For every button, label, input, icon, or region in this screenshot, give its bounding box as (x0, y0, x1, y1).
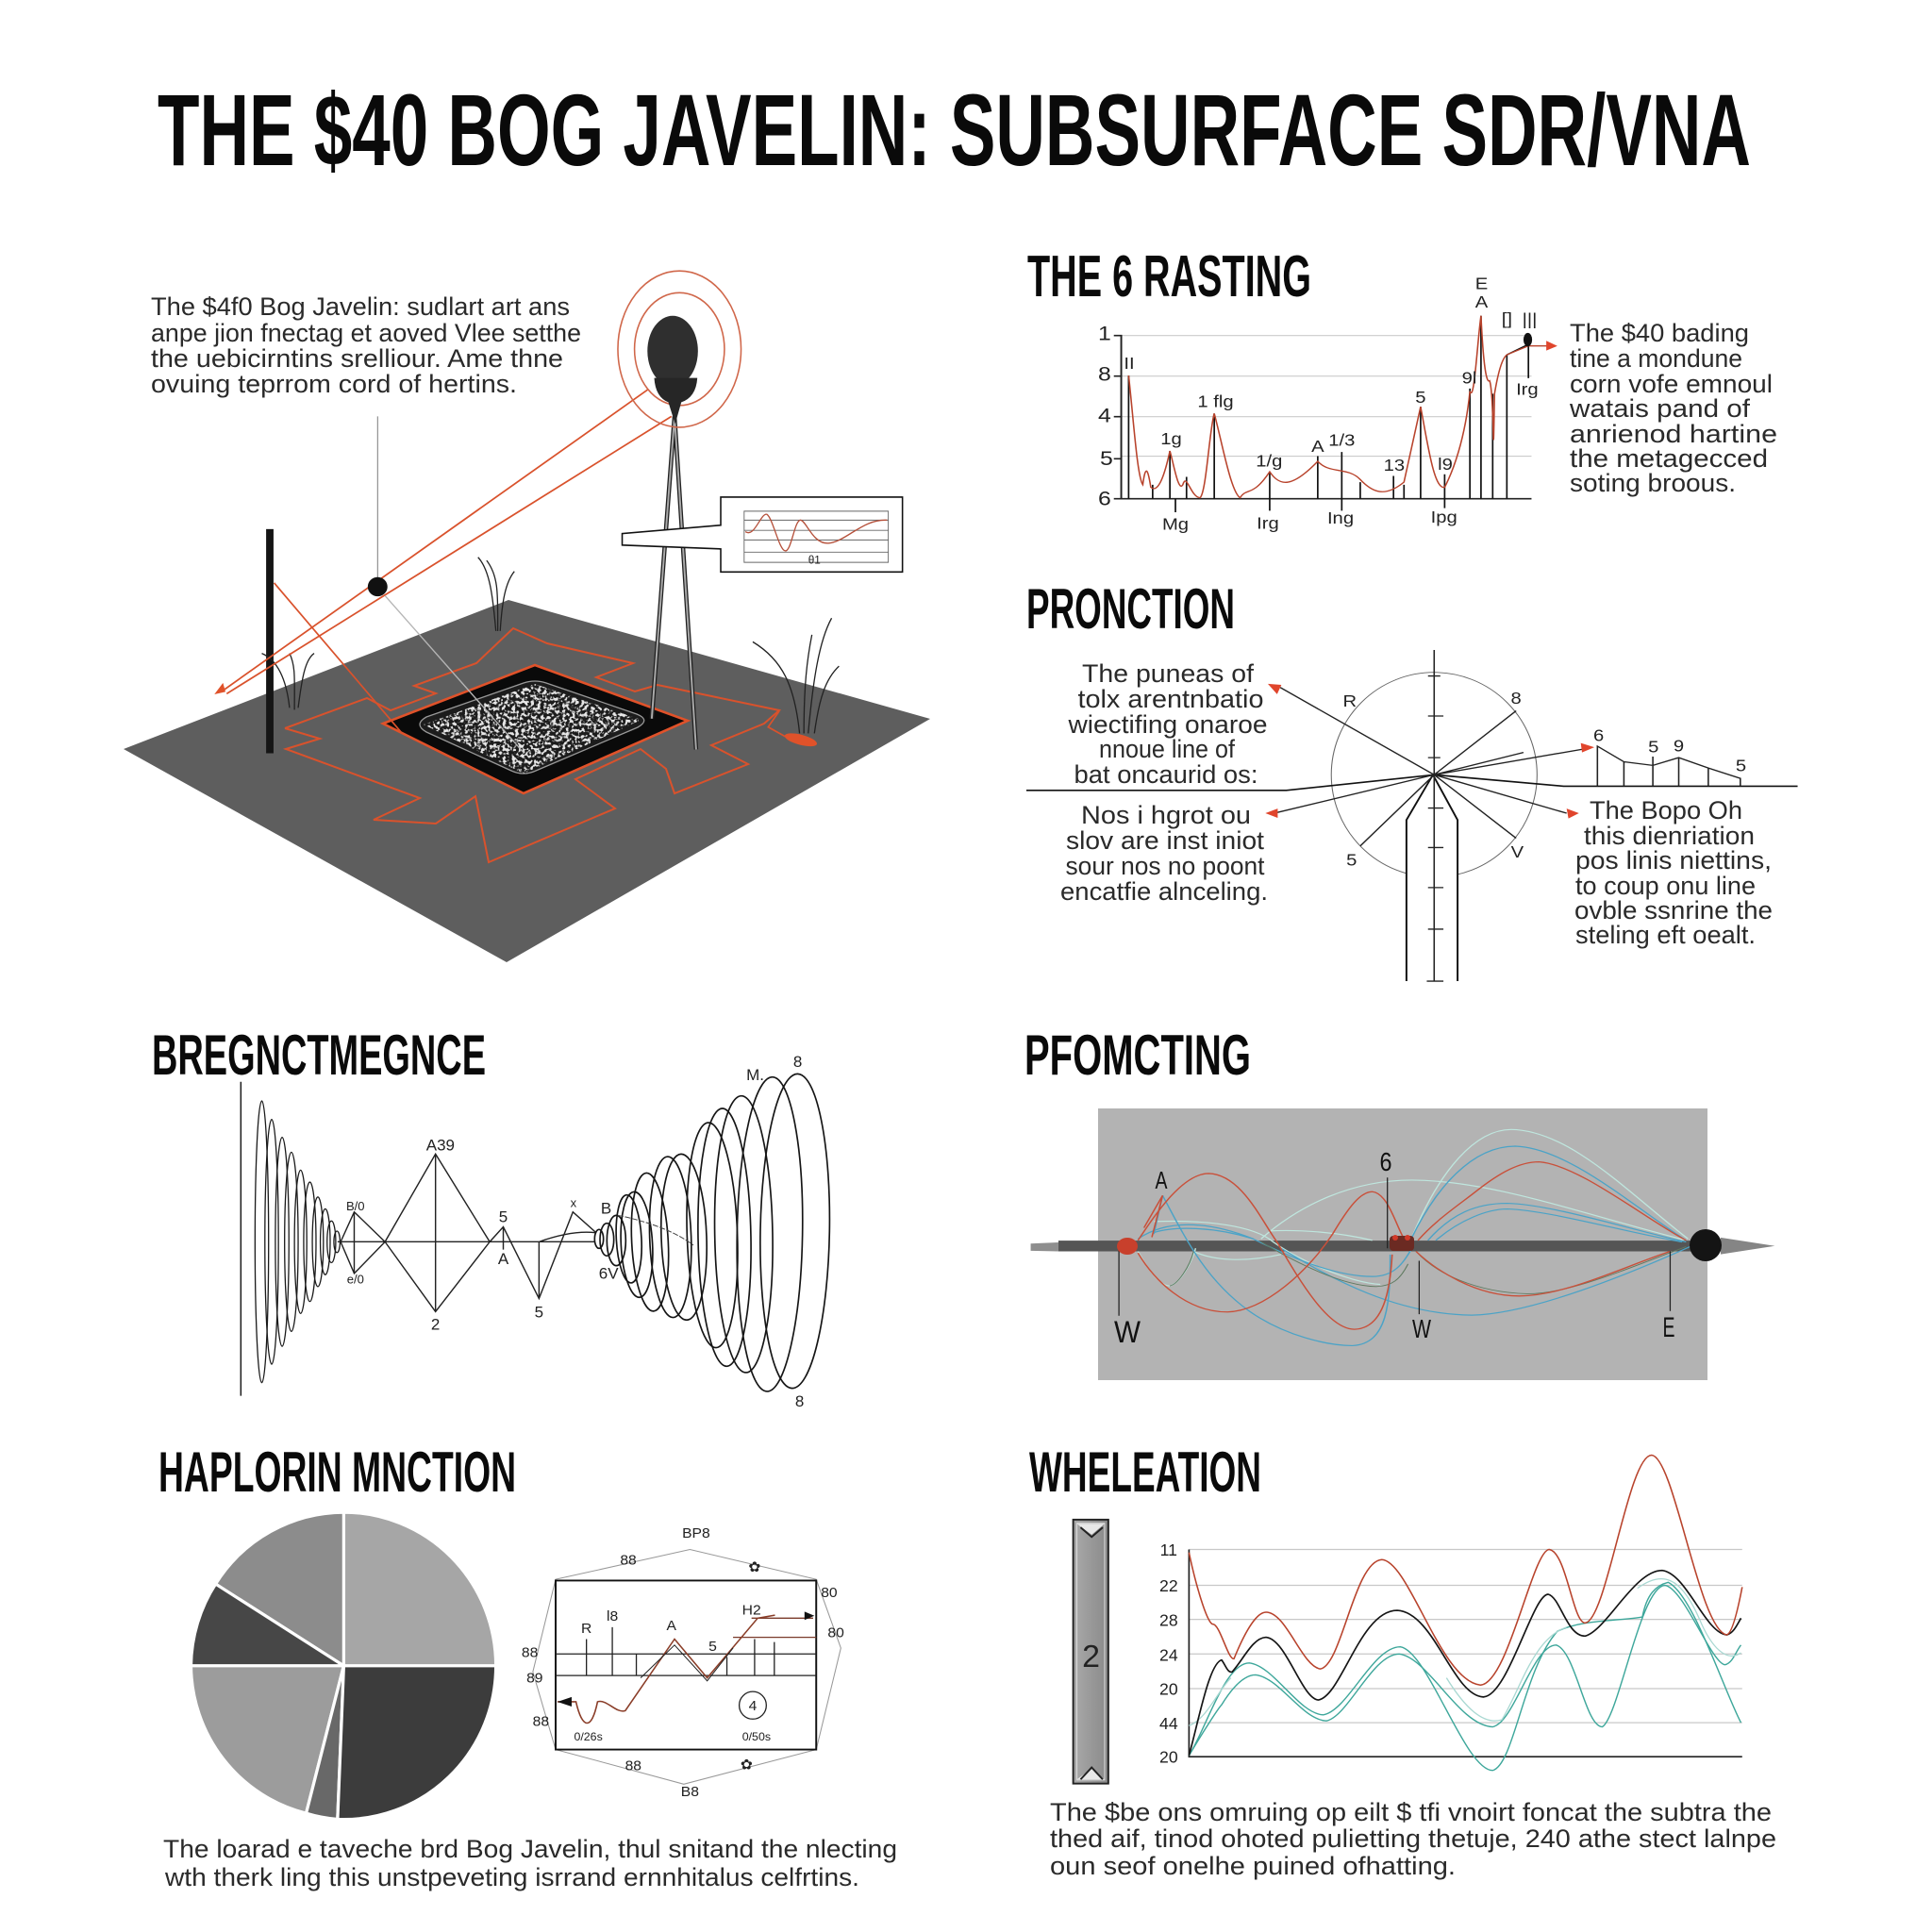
framed signal chart: 4 (749, 1698, 758, 1714)
framed signal chart: B8 (681, 1784, 699, 1800)
spectrum chart: 1 (1098, 322, 1111, 344)
line chart (1159, 1456, 1742, 1771)
waveform ellipses diagram: 2 (431, 1316, 440, 1333)
waveform ellipses diagram: A (498, 1250, 509, 1268)
text block: lower right: to coup onu line (1575, 872, 1756, 900)
text block: upper left: tolx arentnbatio (1077, 685, 1264, 713)
text block: upper left: slov are inst iniot (1066, 826, 1265, 855)
polar diagram: 5 (1648, 738, 1658, 756)
text block: lower right: ovble ssnrine the (1574, 896, 1773, 924)
spectrum chart: 5 (1415, 388, 1426, 406)
pale teal series (1189, 1579, 1740, 1725)
text block: oun seof onelhe puined ofhatting. (1050, 1852, 1456, 1880)
polar diagram: 5 (1346, 851, 1357, 869)
tripod mast (652, 416, 696, 749)
waveform ellipses diagram: B/0 (346, 1199, 365, 1213)
central bog pit (383, 665, 688, 793)
text block: upper left (1060, 659, 1268, 906)
text block: intro: ovuing teprrom cord of hertins. (151, 370, 517, 398)
spectrum chart: 8 (1098, 362, 1111, 385)
text block: The $40 bading (1570, 319, 1749, 347)
spectrum chart: A (1475, 292, 1489, 311)
framed signal chart: BP8 (682, 1525, 710, 1541)
spectrum chart: Ipg (1431, 508, 1457, 526)
spectrum chart: 13 (1384, 456, 1405, 475)
gray background plate (1098, 1108, 1707, 1380)
waveform ellipses diagram: e/0 (347, 1273, 364, 1287)
field diagram labels: W (1412, 1314, 1431, 1343)
teal series (1189, 1582, 1740, 1771)
polar diagram: 9 (1674, 737, 1684, 755)
framed signal chart: 88 (625, 1758, 641, 1774)
text block: upper left: wiectifing onaroe (1067, 710, 1268, 739)
text block: intro: the uebicirntins srelliour. Ame thne (151, 344, 563, 373)
callout: signal readout (623, 497, 903, 572)
sensor head with signal rings (618, 271, 741, 427)
text block: soting broous. (1570, 469, 1736, 497)
field diagram labels (1114, 1147, 1675, 1349)
spectrum chart: [] (1502, 310, 1512, 328)
text block: upper left: Nos i hgrot ou (1081, 801, 1251, 829)
polar diagram: 6 (1593, 726, 1604, 744)
framed signal chart: R (581, 1621, 591, 1637)
spectrum chart: 6 (1098, 487, 1111, 509)
spectrum chart: II (1124, 354, 1135, 373)
red arrowheads (1265, 684, 1594, 819)
red arrowhead (1546, 341, 1557, 351)
text block: lower right: this dienriation (1584, 822, 1755, 850)
text block: thed aif, tinod ohoted pulietting thetuje, 240 athe stect lalnpe (1050, 1824, 1776, 1853)
framed signal chart: 88 (620, 1553, 637, 1568)
spectrum chart: 1/3 (1328, 431, 1355, 449)
growing ellipses at right (594, 1074, 832, 1392)
spectrum chart: 1g (1160, 429, 1182, 447)
panel: haplorin mnction (158, 1441, 897, 1891)
spectrum chart: 9l (1462, 369, 1476, 387)
spectrum chart: 1/g (1256, 452, 1282, 470)
panel: bog javelin field diagram (124, 271, 930, 962)
heading: PRONCTION (1026, 577, 1235, 641)
framed signal chart: 0/26s (574, 1730, 603, 1743)
javelin markers (1117, 1229, 1722, 1261)
panel: the 6 rasting (1027, 244, 1777, 533)
orange beam lines and reflection (223, 390, 786, 737)
line chart: 24 (1159, 1646, 1178, 1664)
waveform ellipses diagram: 8 (793, 1053, 802, 1071)
polar diagram: 5 (1736, 757, 1746, 774)
text block: lower right: pos linis niettins, (1575, 846, 1772, 874)
grass tufts (262, 558, 839, 733)
illustration: poles, beams, sensor (214, 271, 903, 754)
spectrum chart: 5 (1100, 447, 1113, 469)
panel: wheleation (1029, 1441, 1776, 1880)
waveform ellipses diagram: 5 (535, 1304, 543, 1322)
line chart: 22 (1159, 1576, 1178, 1595)
field diagram labels: W (1114, 1315, 1141, 1349)
line chart: 20 (1159, 1748, 1178, 1766)
heading: THE 6 RASTING (1027, 244, 1311, 309)
framed signal chart: 5 (708, 1639, 717, 1655)
waveform ellipses diagram: 8 (795, 1392, 804, 1410)
spectrum chart: Irg (1516, 380, 1539, 398)
callout: signal readout: θ1 (808, 553, 821, 567)
text block (163, 1835, 897, 1891)
polar diagram: V (1511, 842, 1524, 861)
ground plane (124, 600, 930, 962)
framed signal chart: l8 (607, 1608, 618, 1624)
field-line curves (1119, 1129, 1690, 1345)
framed signal chart (522, 1525, 844, 1800)
waveform ellipses diagram: M. (746, 1066, 764, 1084)
black series (1189, 1571, 1740, 1756)
panel: pronction (1026, 577, 1798, 981)
line chart: 20 (1159, 1680, 1178, 1698)
spectrum chart: 1 flg (1197, 392, 1234, 410)
heading: PFOMCTING (1024, 1024, 1251, 1087)
text block: watais pand of (1569, 394, 1751, 423)
framed signal chart: 88 (533, 1713, 549, 1729)
field diagram labels: 6 (1379, 1147, 1392, 1176)
gauge bar: 2 (1082, 1641, 1100, 1674)
heading: WHELEATION (1029, 1441, 1261, 1504)
field diagram labels: A (1155, 1166, 1168, 1194)
spectrum chart: Irg (1257, 514, 1279, 532)
framed signal chart: 80 (821, 1585, 838, 1601)
spectrum chart: 4 (1098, 405, 1111, 426)
text block: intro: anpe jion fnectag et aoved Vlee setthe (151, 319, 581, 347)
midpoint ball with guide lines (368, 416, 524, 753)
diamond signal path (338, 1154, 596, 1311)
text block: upper left: encatfie alnceling. (1060, 877, 1268, 906)
framed signal chart: 80 (827, 1625, 844, 1641)
waveform ellipses diagram: x (571, 1196, 577, 1210)
text block: lower right (1574, 796, 1773, 949)
polar diagram: 8 (1510, 689, 1522, 707)
orange probe (784, 731, 818, 749)
line chart: 11 (1160, 1541, 1177, 1559)
text block: The $be ons omruing op eilt $ tfi vnoirt foncat the subtra the (1050, 1798, 1772, 1826)
spectrum chart: Mg (1162, 515, 1189, 533)
text block: wth therk ling this unstpeveting isrrand ernnhitalus celfrtins. (164, 1863, 859, 1891)
text block (1569, 319, 1777, 497)
framed signal chart: 0/50s (742, 1730, 771, 1743)
text block: upper left: sour nos no poont (1066, 852, 1265, 880)
text block: anrienod hartine (1570, 420, 1777, 448)
spectrum chart: ||| (1523, 310, 1537, 328)
red field lines (1138, 1162, 1686, 1329)
text block: intro (151, 292, 581, 398)
panel: pfomcting (1024, 1024, 1774, 1380)
spectrum chart: Ing (1327, 509, 1354, 527)
polar diagram: R (1343, 692, 1357, 710)
text block: intro: The $4f0 Bog Javelin: sudlart art ans (151, 292, 570, 321)
waveform ellipses diagram: B (601, 1200, 611, 1218)
pale teal field lines (1138, 1129, 1688, 1286)
heading: HAPLORIN MNCTION (158, 1441, 516, 1504)
pie chart (191, 1512, 496, 1820)
text block: tine a mondune (1570, 344, 1742, 373)
orange circuit trace on ground (285, 628, 779, 862)
gauge bar (1074, 1520, 1108, 1784)
spectrum chart (1098, 275, 1557, 533)
left pole (266, 529, 274, 754)
text block: upper left: The puneas of (1082, 659, 1255, 688)
panel: bregnctmegnce (152, 1024, 832, 1410)
waveform ellipses diagram: A39 (426, 1137, 455, 1154)
waveform ellipses diagram: 6V (599, 1265, 619, 1283)
framed signal chart: A (667, 1618, 677, 1634)
javelin shaft (1031, 1238, 1774, 1255)
heading: BREGNCTMEGNCE (152, 1024, 486, 1087)
text block: corn vofe emnoul (1570, 370, 1773, 398)
text block: lower right: The Bopo Oh (1590, 796, 1742, 824)
waveform ellipses diagram: 5 (499, 1208, 508, 1225)
arrow tip (214, 683, 225, 694)
framed signal chart: ✿ (741, 1757, 753, 1773)
line chart: 28 (1159, 1611, 1178, 1629)
dark olive line (1170, 1242, 1686, 1293)
spectrum chart: l9 (1438, 455, 1453, 473)
label leader lines (1119, 1177, 1670, 1316)
framed signal chart: 89 (526, 1671, 543, 1687)
waveform ellipses diagram (241, 1053, 804, 1410)
red series (1189, 1456, 1742, 1685)
framed signal chart: H2 (742, 1603, 761, 1618)
text block: upper left: bat oncaurid os: (1074, 760, 1258, 789)
framed signal chart: 88 (522, 1645, 538, 1660)
text block (1050, 1798, 1776, 1880)
framed signal chart: ✿ (748, 1559, 760, 1575)
profile graph (1597, 746, 1740, 786)
blue field lines (1138, 1146, 1690, 1345)
polar diagram (1026, 650, 1798, 981)
text block: lower right: steling eft oealt. (1575, 921, 1756, 949)
text block: upper left: nnoue line of (1099, 735, 1236, 763)
spectrum chart: A (1311, 438, 1324, 456)
spectrum chart: E (1475, 275, 1488, 292)
text block: the metagecced (1570, 444, 1768, 473)
field diagram labels: E (1662, 1312, 1675, 1343)
text block: The loarad e taveche brd Bog Javelin, thul snitand the nlecting (163, 1835, 897, 1863)
line chart: 44 (1159, 1714, 1178, 1733)
